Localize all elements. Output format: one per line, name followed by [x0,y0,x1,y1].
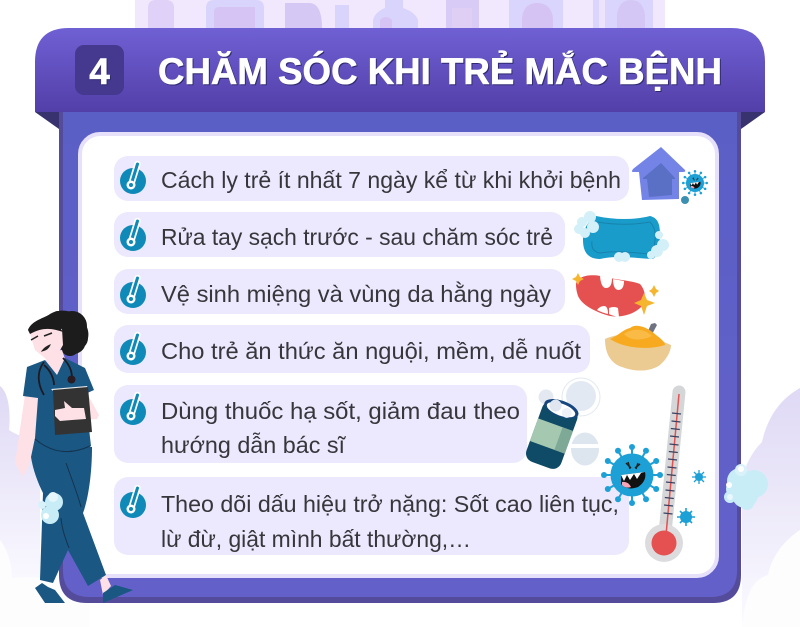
main frame body [59,112,741,603]
icon: mouth with sparkles [572,273,659,317]
background: left cloud [0,386,40,590]
neck [46,350,66,376]
step 3: Vệ sinh miệng và vùng da hằng ngày [161,281,552,307]
step 2: Rửa tay sạch trước - sau chăm sóc trẻ [161,224,553,250]
step 5: hướng dẫn bác sĩ [161,432,347,458]
icon: thermometer [645,392,683,562]
section number badge [75,45,124,95]
step 1: Cách ly trẻ ít nhất 7 ngày kể từ khi khởi bệnh [161,167,621,193]
icon: bowl of porridge [605,323,671,371]
bottle [523,395,581,471]
header banner [35,28,765,112]
step 4 [114,325,590,373]
right arm [55,388,99,421]
icon: house with virus [632,147,708,204]
stethoscope [39,358,72,395]
left arm [15,395,38,477]
step 6: Theo dõi dấu hiệu trở nặng: Sốt cao liên tục, [161,491,619,517]
step 2 [114,212,565,257]
step 3 [114,269,565,314]
trousers [31,438,106,586]
hair back [28,311,88,356]
background: right cloud [742,388,800,627]
fringe [28,316,63,334]
step 5: Dùng thuốc hạ sốt, giảm đau theo [161,398,520,424]
face [30,327,63,359]
icon: soap foam on frame [724,464,768,510]
nurse illustration [15,311,133,603]
step 1 [114,156,629,201]
step 6: lừ đừ, giật mình bất thường,… [161,526,471,552]
header fold left [35,112,59,129]
step 4: Cho trẻ ăn thức ăn nguội, mềm, dễ nuốt [161,338,582,364]
step 6 [114,477,629,555]
hand on clipboard [55,401,86,421]
icon: small germs [677,470,706,526]
step 5 [114,385,527,463]
scrub top [23,358,94,450]
header fold right [741,112,765,129]
section number badge: 4 [89,51,110,92]
list of care steps [114,156,629,555]
title: CHĂM SÓC KHI TRẺ MẮC BỆNH [158,50,722,92]
shoes [35,583,65,603]
bottle cap [562,378,600,416]
icon: soap bar with bubbles [574,211,669,262]
icon: large virus [601,444,663,506]
background: top building silhouettes [135,0,665,28]
waist line [35,439,90,452]
white content panel [80,134,717,576]
large pill [571,432,599,466]
clipboard [51,386,92,435]
icon: medicine bottle and pills [523,378,600,471]
soap bubble on knee [38,492,63,524]
eyes and smile [31,333,52,340]
